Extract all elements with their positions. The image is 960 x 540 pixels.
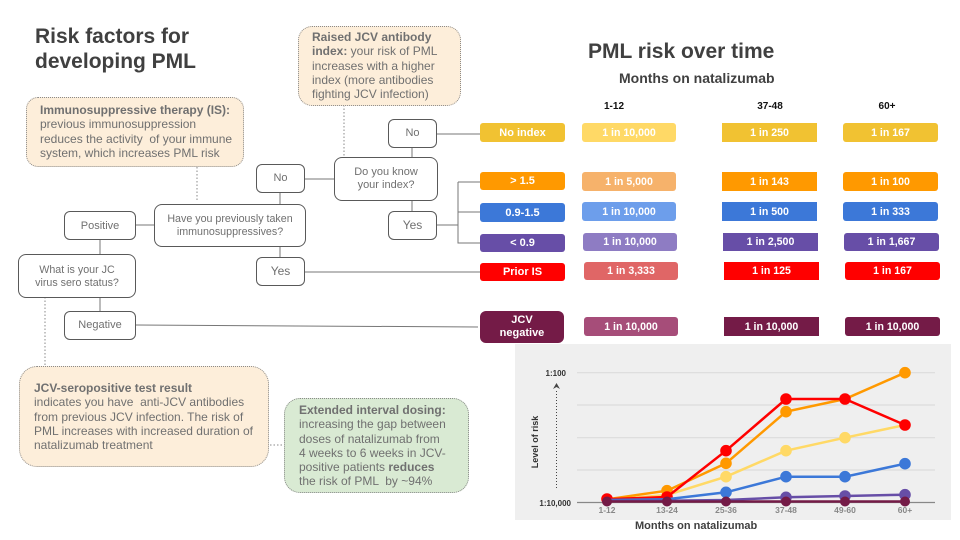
callout: raised JCV antibody index: increases with a higher <box>312 59 435 73</box>
callout: extended interval dosing: doses of natalizumab from <box>299 432 440 446</box>
title: risk factors: Risk factors for <box>35 25 189 48</box>
node: positive <box>64 211 136 240</box>
cell: <0.9 37-48: 1 in 2,500 <box>747 236 794 248</box>
x-axis labels: 60+ <box>898 505 912 515</box>
callout: raised JCV antibody index: Raised JCV antibody <box>312 30 431 44</box>
node: previously taken immunosuppressives: immunosuppressives? <box>177 226 283 238</box>
title: risk factors: developing PML <box>35 50 196 73</box>
row label: 0.9-1.5: 0.9-1.5 <box>505 206 540 218</box>
callout: immunosuppressive therapy <box>26 97 244 167</box>
axis labels: 1:10,000 <box>539 499 572 508</box>
node: JC virus sero status: virus sero status? <box>35 277 119 289</box>
cell: 0.9-1.5 37-48 <box>722 202 817 221</box>
node: no (index): No <box>405 127 420 139</box>
callout: extended interval dosing: the risk of PML by ~94% <box>299 474 432 488</box>
title: PML risk over time: PML risk over time <box>588 40 774 63</box>
series: index below 0.9 <box>607 489 910 503</box>
callout: extended interval dosing <box>284 398 469 493</box>
cell: <0.9 37-48 <box>723 233 818 251</box>
callout: JCV-seropositive test result: from previous JCV infection. The risk of <box>34 410 243 424</box>
callout: extended interval dosing: increasing the gap between <box>299 417 446 431</box>
node: no (IS) <box>256 164 305 193</box>
callout: extended interval dosing: 4 weeks to 6 weeks in JCV- <box>299 446 446 460</box>
cell: 0.9-1.5 60+ <box>843 202 938 221</box>
cell: JCV negative 37-48: 1 in 10,000 <box>745 320 798 332</box>
node: JC virus sero status <box>18 254 136 298</box>
cell: no index 1-12: 1 in 10,000 <box>602 126 656 138</box>
cell: no index 1-12 <box>582 123 676 142</box>
cell: JCV negative 1-12: 1 in 10,000 <box>604 320 658 332</box>
x-axis labels: 49-60 <box>834 505 856 515</box>
column header: 37-48: 37-48 <box>757 101 783 112</box>
cell: no index 60+ <box>843 123 938 142</box>
y-axis arrow <box>553 383 560 488</box>
node: no (IS): No <box>273 172 288 184</box>
row label: no index: No index <box>499 126 546 138</box>
column header: 1-12: 1-12 <box>604 101 624 112</box>
node: JC virus sero status: What is your JC <box>39 264 115 276</box>
node: negative: Negative <box>78 319 122 331</box>
node: no (index) <box>388 119 437 148</box>
row label: <0.9 <box>480 234 565 252</box>
chart x-axis title: Months on natalizumab <box>635 520 757 532</box>
cell: JCV negative 60+: 1 in 10,000 <box>866 320 919 332</box>
node: do you know your index: Do you know <box>354 166 418 178</box>
node: negative <box>64 311 136 340</box>
cell: prior IS 60+ <box>845 262 940 280</box>
row label: prior IS <box>480 263 565 281</box>
row label: JCV negative: negative <box>500 327 544 339</box>
x-axis labels: 37-48 <box>775 505 797 515</box>
cell: prior IS 37-48 <box>724 262 819 280</box>
cell: 0.9-1.5 1-12: 1 in 10,000 <box>602 206 656 218</box>
callout: extended interval dosing: positive patients reduces <box>299 460 434 474</box>
row label: no index <box>480 123 565 142</box>
node: previously taken immunosuppressives: Have you previously taken <box>167 212 293 224</box>
axis labels <box>539 369 572 508</box>
node: yes (index) <box>388 211 437 240</box>
callout: immunosuppressive therapy: previous immunosuppression <box>40 117 196 131</box>
subtitle: months on natalizumab: Months on natalizumab <box>619 70 775 86</box>
callout: immunosuppressive therapy: Immunosuppressive therapy (IS): <box>40 103 230 117</box>
row label: JCV negative <box>480 311 564 343</box>
series: prior IS <box>602 394 910 504</box>
series: index above 1.5 <box>607 367 910 499</box>
cell: >1.5 60+: 1 in 100 <box>871 176 910 188</box>
callout: JCV-seropositive test result: PML increases with increased duration of <box>34 424 253 438</box>
title: risk factors <box>35 25 196 73</box>
callout: JCV-seropositive test result <box>19 366 269 467</box>
cell: <0.9 1-12 <box>583 233 677 251</box>
x-axis labels: 13-24 <box>656 505 678 515</box>
column header: 60+: 60+ <box>879 101 895 112</box>
cell: >1.5 1-12: 1 in 5,000 <box>605 176 653 188</box>
row label: prior IS: Prior IS <box>503 266 542 278</box>
cell: 0.9-1.5 1-12 <box>582 202 676 221</box>
cell: >1.5 37-48 <box>722 172 817 191</box>
cell: 0.9-1.5 37-48: 1 in 500 <box>750 206 789 218</box>
node: previously taken immunosuppressives <box>154 204 306 247</box>
callout: immunosuppressive therapy: system, which increases PML risk <box>40 146 220 160</box>
callout: JCV-seropositive test result: indicates you have anti-JCV antibodies <box>34 395 244 409</box>
node: yes (IS) <box>256 257 305 286</box>
callout: extended interval dosing: Extended interval dosing: <box>299 403 446 417</box>
node: positive: Positive <box>81 220 119 232</box>
callout: immunosuppressive therapy: reduces the activity of your immune <box>40 132 232 146</box>
cell: <0.9 60+: 1 in 1,667 <box>868 236 915 248</box>
node: do you know your index: your index? <box>358 179 414 191</box>
cell: no index 37-48: 1 in 250 <box>750 126 789 138</box>
row label: >1.5: > 1.5 <box>510 175 535 187</box>
line chart: level of risk <box>515 344 951 520</box>
row label: <0.9: < 0.9 <box>510 237 535 249</box>
cell: no index 37-48 <box>722 123 817 142</box>
cell: >1.5 1-12 <box>582 172 676 191</box>
row label: 0.9-1.5 <box>480 203 565 222</box>
x-axis labels: 1-12 <box>598 505 616 515</box>
cell: JCV negative 1-12 <box>584 317 678 336</box>
node: yes (index): Yes <box>403 218 422 232</box>
cell: >1.5 60+ <box>843 172 938 191</box>
cell: <0.9 1-12: 1 in 10,000 <box>603 236 657 248</box>
cell: JCV negative 60+ <box>845 317 940 336</box>
cell: 0.9-1.5 60+: 1 in 333 <box>871 206 910 218</box>
callout: raised JCV antibody index: fighting JCV infection) <box>312 87 429 101</box>
y-axis title: Level of risk <box>530 415 540 468</box>
node: yes (IS): Yes <box>271 264 290 278</box>
cell: >1.5 37-48: 1 in 143 <box>750 176 789 188</box>
cell: prior IS 1-12: 1 in 3,333 <box>607 265 655 277</box>
series: JCV negative <box>602 497 910 506</box>
cell: <0.9 60+ <box>844 233 939 251</box>
callout: JCV-seropositive test result: JCV-seropositive test result <box>34 381 192 395</box>
cell: JCV negative 37-48 <box>724 317 819 336</box>
callout: raised JCV antibody index <box>298 26 461 106</box>
cell: prior IS 1-12 <box>584 262 678 280</box>
cell: no index 60+: 1 in 167 <box>871 126 910 138</box>
series: index 0.9-1.5 <box>607 458 910 500</box>
x-axis labels: 25-36 <box>715 505 737 515</box>
series: no index <box>607 425 905 500</box>
callout: raised JCV antibody index: index (more antibodies <box>312 73 433 87</box>
node: do you know your index <box>334 157 438 201</box>
callout: JCV-seropositive test result: natalizumab treatment <box>34 438 153 452</box>
cell: prior IS 60+: 1 in 167 <box>873 265 912 277</box>
cell: prior IS 37-48: 1 in 125 <box>752 265 791 277</box>
x-axis labels <box>598 505 912 515</box>
row label: JCV negative: JCV <box>511 314 533 326</box>
callout: raised JCV antibody index: index: your risk of PML <box>312 44 437 58</box>
row label: >1.5 <box>480 172 565 190</box>
axis labels: 1:100 <box>546 369 567 378</box>
